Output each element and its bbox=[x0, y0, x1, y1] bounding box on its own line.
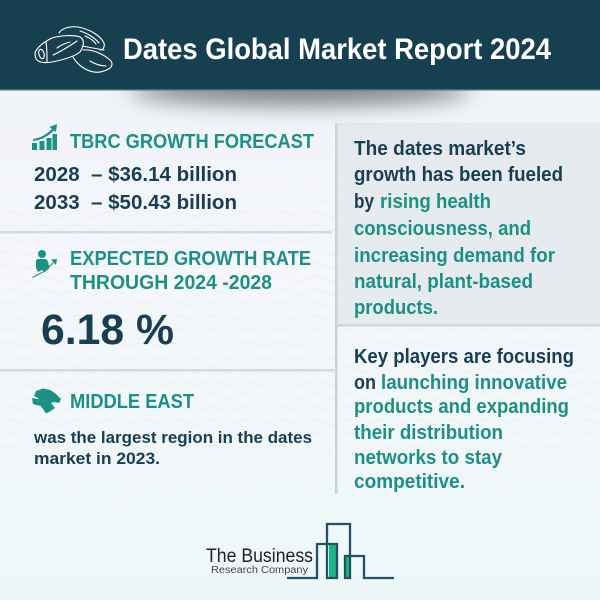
text block: key players: Key players are focusing bbox=[354, 346, 574, 368]
divider: left upper bbox=[0, 231, 332, 234]
text block: market growth drivers: rising health bbox=[380, 191, 491, 213]
text block: market growth drivers: products. bbox=[354, 297, 438, 319]
header shadow bbox=[130, 75, 470, 105]
text block: market growth drivers: increasing demand for bbox=[354, 245, 555, 267]
text block: market growth drivers: by bbox=[354, 191, 375, 213]
text block: market growth drivers bbox=[354, 138, 563, 319]
heading: forecast: TBRC GROWTH FORECAST bbox=[70, 130, 314, 153]
header banner bbox=[0, 0, 600, 90]
panel: middle east bbox=[32, 388, 312, 468]
heading: growth rate bbox=[70, 247, 311, 294]
icon: middle east map bbox=[32, 388, 61, 414]
title: Dates Global Market Report 2024 bbox=[123, 33, 552, 66]
text block: market growth drivers: consciousness, and bbox=[354, 218, 531, 240]
panel: right top shaded panel bbox=[336, 123, 600, 325]
divider: left lower bbox=[0, 369, 336, 372]
text block: market growth drivers: natural, plant-based bbox=[354, 271, 533, 293]
text: region note: was the largest region in the dates bbox=[33, 428, 312, 447]
text: region note bbox=[33, 428, 312, 468]
stat: growth rate value: 6.18 % bbox=[41, 306, 174, 354]
icon: dates bbox=[35, 27, 112, 72]
text block: key players: launching innovative bbox=[381, 372, 567, 394]
heading: middle east: MIDDLE EAST bbox=[70, 390, 194, 413]
text block: key players: their distribution bbox=[354, 422, 503, 444]
panel: growth forecast bbox=[32, 124, 314, 214]
logo: The Business Research Company bbox=[206, 524, 394, 578]
heading: growth rate: EXPECTED GROWTH RATE bbox=[70, 247, 311, 270]
text block: key players bbox=[354, 346, 574, 493]
logo: The Business Research Company: Research Company bbox=[211, 565, 308, 576]
icon: person with arrow bbox=[32, 250, 57, 278]
text block: market growth drivers: growth has been fueled bbox=[354, 164, 563, 186]
logo: The Business Research Company: The Business bbox=[206, 546, 313, 567]
text block: key players: networks to stay bbox=[354, 447, 503, 469]
panel: growth rate bbox=[32, 247, 311, 354]
text block: key players: products and expanding bbox=[354, 396, 569, 418]
text: 2033 forecast: 2033 – $50.43 billion bbox=[34, 191, 237, 214]
heading: growth rate: THROUGH 2024 -2028 bbox=[70, 271, 272, 294]
text block: market growth drivers: The dates market’s bbox=[354, 138, 526, 160]
text: 2028 forecast: 2028 – $36.14 billion bbox=[34, 163, 237, 186]
divider: right bbox=[336, 324, 600, 326]
text block: key players: competitive. bbox=[354, 471, 465, 493]
text block: key players: on bbox=[354, 372, 376, 394]
divider: vertical bbox=[335, 124, 338, 494]
text: region note: market in 2023. bbox=[34, 449, 160, 468]
icon: bar chart with arrow bbox=[32, 124, 57, 150]
